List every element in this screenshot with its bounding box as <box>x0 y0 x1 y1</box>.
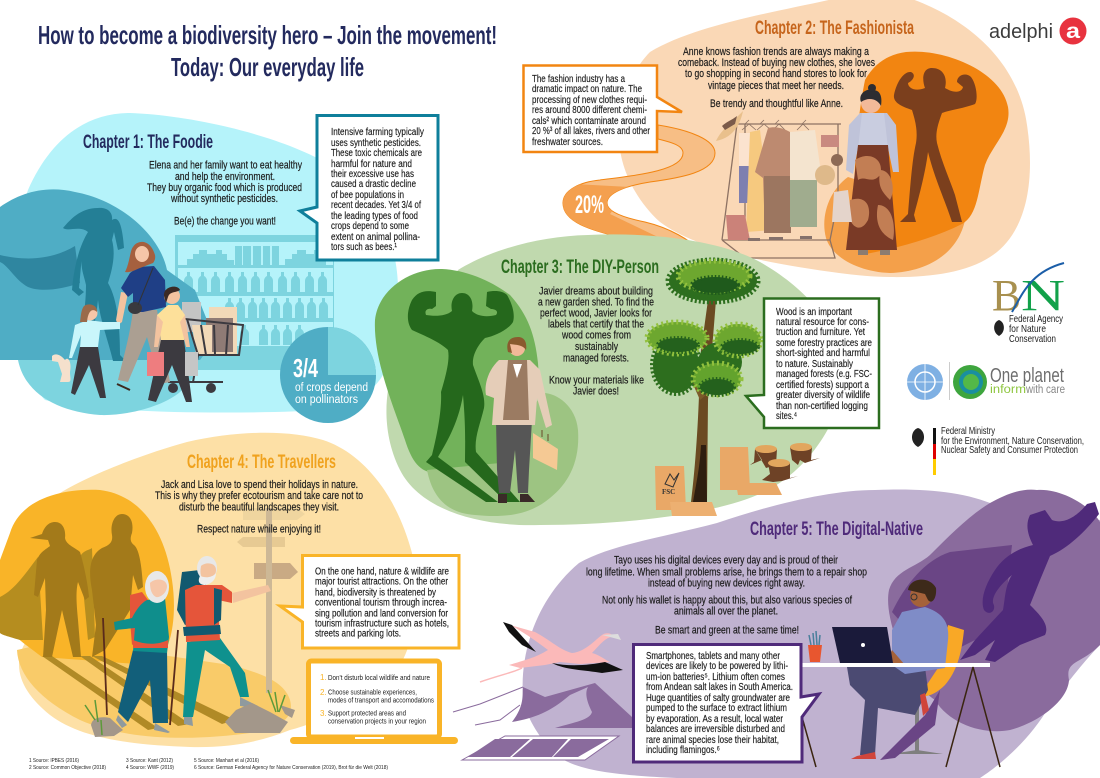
bunny toy <box>52 354 71 382</box>
chapter 2 story text: Anne knows fashion trends are always making a <box>683 46 870 58</box>
laptop with tips: Support protected areas and <box>328 708 406 718</box>
figure: Elena <box>116 242 170 390</box>
laptop with tips: Choose sustainable experiences, <box>328 688 417 696</box>
logo: United Nations <box>907 364 943 400</box>
source footnotes: 2 Source: Common Objective (2018) <box>29 765 106 771</box>
callout: intensive farming: the leading types of food <box>331 211 418 222</box>
source footnotes: 3 Source: Kant (2012) <box>126 758 173 764</box>
chapter 1 story text: Be(e) the change you want! <box>174 216 276 228</box>
chapter 5 story text: long lifetime. When small problems arise, he brings them to a repair shop <box>586 566 867 578</box>
logo: BfN Federal Agency for Nature Conservation: Conservation <box>1009 333 1056 345</box>
green spotlight blob <box>375 269 538 473</box>
callout: intensive farming: extent on animal pollina- <box>331 232 420 243</box>
logo: One planet: inform <box>990 384 1026 396</box>
callout: lithium: including flamingos.⁶ <box>646 745 720 756</box>
chapter 5 story text: Tayo uses his digital devices every day and is proud of their <box>614 554 838 566</box>
laptop with tips: Don't disturb local wildlife and nature <box>328 673 430 682</box>
chapter 5 heading: Chapter 5: The Digital-Native <box>750 519 923 540</box>
callout: tourism: On the one hand, nature & wildlife are <box>315 566 449 578</box>
shopping cart <box>168 302 243 393</box>
signpost <box>237 508 305 693</box>
lighter green spotlight <box>427 393 578 516</box>
callout: fashion industry: cals² which contaminate around <box>532 116 646 127</box>
chapter 1 heading: Chapter 1: The Foodie <box>83 132 213 153</box>
callout: wood: natural resource for cons- <box>776 317 869 328</box>
source footnotes: 6 Source: German Federal Agency for Nature Conservation (2019), Brot für die Welt (2018) <box>194 765 388 771</box>
panel: chapter 5 the digital native <box>453 490 1100 778</box>
logo: Federal Ministry <box>912 426 1084 475</box>
chapter 3 story text: Javier does! <box>573 386 619 398</box>
source footnotes: 1 Source: IPBES (2016) <box>29 758 79 764</box>
callout: tourism: tourism infrastructure such as hotels, <box>315 618 449 630</box>
callout: lithium: balances are irreversible disturbed and <box>646 724 785 735</box>
chapter 1 story text <box>147 160 302 228</box>
chapter 2 story text: to go shopping in second hand stores to look for <box>685 68 867 80</box>
mountain outline <box>453 687 523 725</box>
river of pollution with 20%: 20% <box>575 191 604 219</box>
hero shadow of Tayo <box>960 502 1099 662</box>
logo: BfN Federal Agency for Nature Conservation: Federal Agency <box>1009 313 1064 325</box>
chapter 4 story text <box>155 479 363 536</box>
teal shadow blob <box>0 189 215 360</box>
callout: lithium: Smartphones, tablets and many other <box>646 651 781 662</box>
hero shadow of Anne <box>894 68 977 222</box>
callout: intensive farming: harmful for nature and <box>331 159 412 170</box>
pencil cup <box>808 631 822 662</box>
logo: BfN Federal Agency for Nature Conservation <box>992 263 1065 345</box>
callout: tourism: conventional tourism through increa- <box>315 598 447 608</box>
callout: intensive farming: their excessive use has <box>331 169 414 180</box>
hero cape shadow <box>0 246 80 290</box>
callout: intensive farming <box>300 116 438 260</box>
chapter 5 background blob <box>523 490 1100 778</box>
chapter 3 story text: wood comes from <box>561 330 631 342</box>
laptop <box>832 627 893 663</box>
laptop with tips: 1. <box>320 673 327 682</box>
laptop with tips <box>290 661 458 744</box>
panel: chapter 2 the fashionista <box>563 0 1030 277</box>
chapter 5 story text: instead of buying new devices right away. <box>648 578 805 590</box>
hero shadow of Elena <box>63 208 126 365</box>
laptop with tips: modes of transport and accomodations <box>328 696 434 704</box>
figure: Javier <box>486 337 558 503</box>
callout: wood: than non-certified logging <box>776 401 868 412</box>
callout: wood: sites.⁴ <box>776 411 797 422</box>
callout: fashion industry <box>524 66 682 152</box>
callout: lithium <box>634 644 819 762</box>
callout: tourism: streets and parking lots. <box>315 628 401 640</box>
mountains <box>512 683 632 728</box>
figure: girl <box>69 304 120 398</box>
callout: fashion industry: freshwater sources. <box>532 137 603 148</box>
callout: lithium: devices are likely to be powered by lithi- <box>646 661 788 672</box>
tree <box>647 261 761 502</box>
chapter 4 story text: This is why they prefer ecotourism and take care not to <box>155 490 363 502</box>
logo: One planet <box>949 362 1065 400</box>
callout: lithium: pumped to the surface to extract lithium <box>646 703 787 714</box>
figure: Anne <box>832 84 899 255</box>
panel: chapter 4 the travellers <box>0 433 459 771</box>
chapter 3 story text <box>538 286 654 398</box>
callout: wood: Wood is an important <box>776 307 852 318</box>
solar panels <box>462 736 619 760</box>
callout: wood: short-sighted and harmful <box>776 348 870 359</box>
chapter 1 background blob <box>18 113 398 413</box>
logo: adelphi <box>989 18 1086 44</box>
chapter 3 story text: Know your materials like <box>549 374 644 386</box>
callout: intensive farming: crops depend to some <box>331 221 409 232</box>
supermarket shelves <box>175 235 334 370</box>
laptop with tips: conservation projects in your region <box>328 716 426 726</box>
callout: intensive farming: These toxic chemicals are <box>331 148 422 159</box>
source footnotes: 4 Source: WWF (2019) <box>126 765 174 771</box>
callout: lithium: from Andean salt lakes in South America. <box>646 682 793 693</box>
wood and stumps: FSC <box>662 488 675 496</box>
pie chart: 3/4 of crops depend on pollinators: 3/4 <box>293 353 318 383</box>
laptop with tips: 2. <box>320 688 327 697</box>
chapter 3 story text: labels that certify that the <box>548 318 644 330</box>
chapter 3 story text: sustainably <box>575 341 618 353</box>
chapter 5 story text: Be smart and green at the same time! <box>655 624 799 636</box>
callout: wood: some forestry practices are <box>776 338 872 349</box>
laptop with tips: 3. <box>320 709 327 718</box>
logo: One planet: One planet <box>990 365 1064 387</box>
pie chart: 3/4 of crops depend on pollinators: on pollinators <box>295 394 358 406</box>
chapter 3 heading: Chapter 3: The DIY-Person <box>501 257 659 278</box>
callout: lithium: rare animal species lose their habitat, <box>646 735 779 746</box>
title: Today: Our everyday life <box>171 52 364 82</box>
callout: intensive farming: uses synthetic pesticides. <box>331 138 421 149</box>
orange spotlight blob <box>855 52 1009 255</box>
callout: lithium: by evaporation. As a result, local water <box>646 714 784 725</box>
chapter 4 story text: disturb the beautiful landscapes they visit. <box>179 502 339 514</box>
callout: wood <box>746 298 879 428</box>
title: How to become a biodiversity hero – Join the movement! <box>38 20 497 50</box>
chapter 1 story text: and help the environment. <box>175 171 275 183</box>
chapter 3 story text: a new garden shed. To find the <box>538 296 654 308</box>
callout: wood: greater diversity of wildlife <box>776 390 870 401</box>
source footnotes <box>29 758 388 771</box>
chapter 3 story text: perfect wood, Javier looks for <box>540 308 652 320</box>
callout: tourism: major tourist attractions. On the other <box>315 576 449 588</box>
chapter 2 story text: Be trendy and thoughtful like Anne. <box>710 98 843 110</box>
flamingo <box>480 622 623 682</box>
chapter 2 heading: Chapter 2: The Fashionista <box>755 18 914 39</box>
chapter 3 story text: managed forests. <box>563 352 629 364</box>
panel: chapter 1 the foodie <box>0 113 438 423</box>
chapter 2 background blob <box>619 0 1030 277</box>
river of pollution with 20% <box>563 125 715 252</box>
pie chart: 3/4 of crops depend on pollinators <box>280 327 376 423</box>
logo: BfN Federal Agency for Nature Conservation: for Nature <box>1009 323 1046 335</box>
callout: intensive farming: tors such as bees.¹ <box>331 242 398 253</box>
desk <box>802 663 1000 767</box>
floor shadow <box>18 340 202 415</box>
callout: fashion industry: 20 %³ of all lakes, rivers and other <box>532 126 651 137</box>
chapter 5 story text: animals all over the planet. <box>674 606 778 618</box>
hero shadows of Jack and Lisa <box>0 514 143 657</box>
chapter 3 story text: Javier dreams about building <box>539 286 653 298</box>
chapter 5 story text: Not only his wallet is happy about this, but also various species of <box>602 594 853 606</box>
callout: fashion industry: dramatic impact on nature. The <box>532 84 642 95</box>
ground <box>17 640 291 738</box>
callout: fashion industry: processing of new clothes requi- <box>532 95 647 106</box>
callout: intensive farming: Intensive farming typically <box>331 127 424 138</box>
chapter 4 heading: Chapter 4: The Travellers <box>187 452 336 473</box>
logo: BfN Federal Agency for Nature Conservation: N <box>1021 271 1065 320</box>
callout: wood: to nature. Sustainably <box>776 359 853 370</box>
hero shadow of Javier <box>408 291 520 502</box>
chapter 2 story text: comeback. Instead of buying new clothes, she loves <box>678 57 875 69</box>
callout: tourism: sing pollution and land conversion for <box>315 608 449 620</box>
chapter 1 story text: Elena and her family want to eat healthy <box>149 160 302 172</box>
callout: wood: certified forests) support a <box>776 380 869 391</box>
callout: tourism: hand, biodiversity is threatened by <box>315 588 436 598</box>
callout: tourism <box>280 556 459 648</box>
shadow rays <box>42 656 235 730</box>
callout: fashion industry: res around 8000 different chemi- <box>532 105 647 116</box>
callout: wood: managed forests (e.g. FSC- <box>776 369 872 380</box>
lighter orange spotlight <box>824 177 966 273</box>
wood and stumps <box>655 443 820 516</box>
chapter 4 story text: Jack and Lisa love to spend their holidays in nature. <box>161 479 358 491</box>
figure: hiker Jack <box>177 556 271 726</box>
source footnotes: 5 Source: Manhart et al (2016) <box>194 758 259 764</box>
logo: Federal Ministry: Federal Ministry <box>941 426 995 437</box>
callout: fashion industry: The fashion industry has a <box>532 74 625 85</box>
chapter 4 background blob <box>19 433 416 747</box>
chapter 1 story text: without synthetic pesticides. <box>170 193 278 205</box>
chapter 5 story text <box>586 554 867 636</box>
panel: chapter 3 the DIY person <box>375 234 879 525</box>
figure: boy <box>147 287 198 402</box>
chapter 1 story text: They buy organic food which is produced <box>147 182 302 194</box>
chapter 2 story text <box>678 46 875 110</box>
title <box>38 20 497 82</box>
hero cape shadow <box>892 545 1012 660</box>
logo: adelphi: a <box>1066 20 1080 43</box>
chapter 3 background blob <box>386 234 843 525</box>
clothes rack <box>716 111 843 258</box>
callout: lithium: um-ion batteries⁵. Lithium often comes <box>646 672 785 683</box>
chapter 2 story text: vintage pieces that meet her needs. <box>708 80 844 92</box>
logo: adelphi: adelphi <box>989 21 1053 43</box>
callout: intensive farming: caused a drastic decline <box>331 179 416 190</box>
figure: hiker Lisa <box>103 571 178 733</box>
callout: wood: truction and furniture. Yet <box>776 327 865 338</box>
rocks and grass <box>85 690 295 737</box>
callout: lithium: Huge quantities of salty groundwater are <box>646 693 790 704</box>
callout: intensive farming: recent decades. Yet 3/4 of <box>331 200 421 211</box>
yellow spotlight blob <box>0 490 174 665</box>
logo: One planet: with care <box>1025 384 1065 396</box>
figure: Tayo at desk <box>847 580 964 760</box>
callout: intensive farming: of bee populations in <box>331 190 404 201</box>
purple spotlight blob <box>888 490 1100 731</box>
pie chart: 3/4 of crops depend on pollinators: of crops depend <box>295 382 368 394</box>
logo: BfN Federal Agency for Nature Conservation: B <box>992 271 1021 320</box>
chapter 4 story text: Respect nature while enjoying it! <box>197 524 321 536</box>
